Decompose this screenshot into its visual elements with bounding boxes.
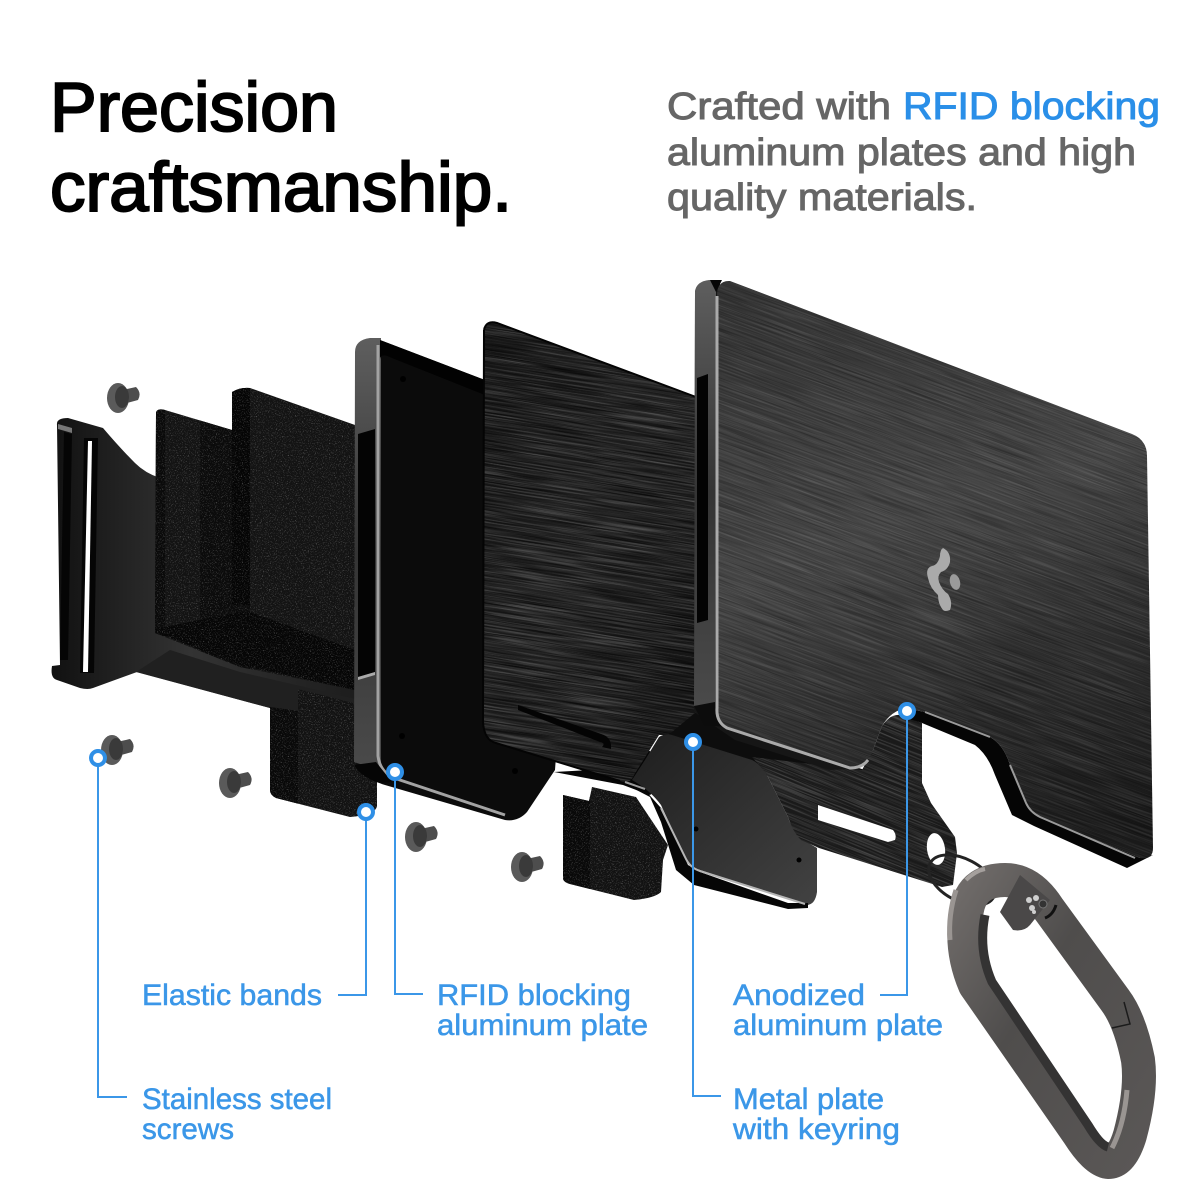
title	[50, 68, 512, 226]
callout: metal plate with keyring: Metal plate	[733, 1083, 884, 1116]
elastic band lower right	[560, 785, 670, 903]
keyring hole	[925, 832, 947, 866]
screw: middle left	[219, 768, 252, 798]
callout: metal plate with keyring: with keyring	[732, 1113, 900, 1146]
finger slot	[518, 705, 611, 749]
callout: stainless steel screws: Stainless steel	[142, 1083, 332, 1116]
keyring slot	[818, 805, 896, 842]
callout: anodized aluminum plate: Anodized	[733, 979, 865, 1012]
subtitle: RFID blocking	[903, 86, 1160, 128]
front anodized aluminum plate	[694, 280, 1153, 868]
back plate with belt slots	[52, 418, 360, 715]
subtitle: quality materials.	[667, 177, 977, 219]
callout: metal plate with keyring	[686, 735, 900, 1146]
icon: brand logo	[927, 548, 962, 611]
callout: RFID blocking aluminum plate	[388, 765, 648, 1042]
subtitle: aluminum plates and high	[667, 132, 1136, 174]
carabiner and keyring	[920, 845, 1139, 1162]
elastic band back	[150, 385, 360, 695]
callout: elastic bands: Elastic bands	[142, 979, 322, 1012]
metal plate with keyring	[624, 712, 957, 909]
screw: left	[101, 735, 134, 765]
callout: RFID blocking aluminum plate: aluminum plate	[437, 1009, 648, 1042]
callout: stainless steel screws: screws	[142, 1113, 234, 1146]
callout: anodized aluminum plate: aluminum plate	[733, 1009, 943, 1042]
elastic band lower left	[270, 689, 377, 817]
screw: top	[107, 383, 140, 413]
screw: right	[511, 852, 544, 882]
screw: middle	[405, 822, 438, 852]
subtitle	[667, 86, 1160, 219]
callout: anodized aluminum plate	[733, 704, 943, 1042]
subtitle: Crafted with	[667, 86, 891, 128]
brushed RFID blocking plate	[482, 321, 695, 795]
title: Precision	[50, 68, 338, 146]
RFID frame plate	[354, 338, 560, 820]
callout: elastic bands	[142, 805, 373, 1012]
title: craftsmanship.	[50, 148, 512, 226]
callout: stainless steel screws	[91, 751, 332, 1146]
plate screw holes	[399, 376, 518, 774]
callout: RFID blocking aluminum plate: RFID blocking	[437, 979, 631, 1012]
